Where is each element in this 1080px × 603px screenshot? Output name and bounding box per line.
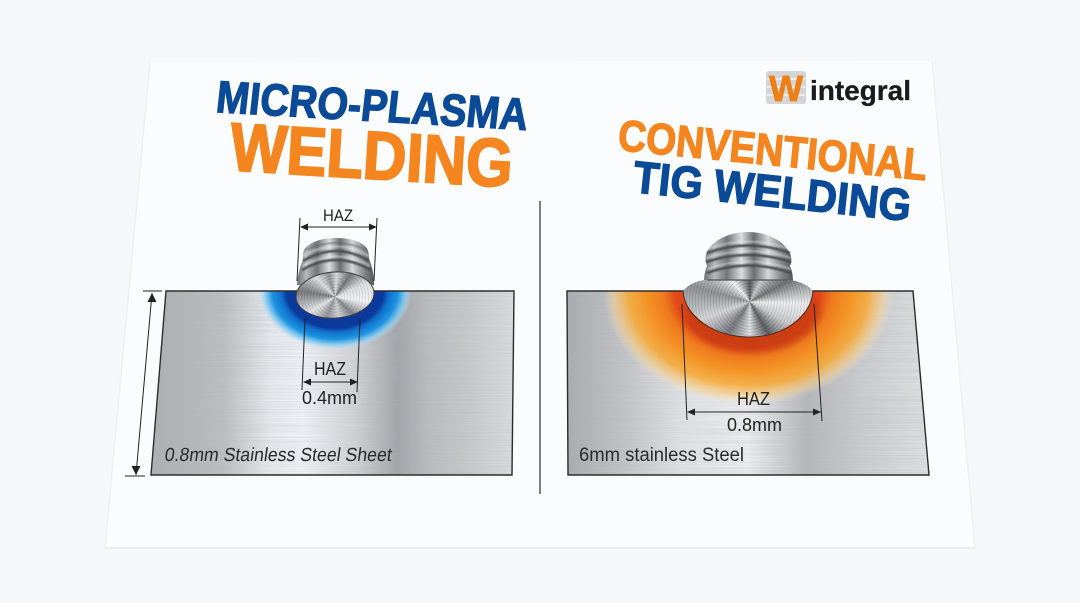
logo: Wintegral: integral: [810, 75, 911, 106]
weld bead: TIG: [683, 232, 814, 339]
poster sheet: [105, 61, 975, 548]
HAZ dimension: micro-plasma 0.4mm: 0.4mm: [302, 388, 357, 408]
label: 0.8mm sheet: 0.8mm Stainless Steel Sheet: [163, 445, 394, 466]
HAZ dimension: micro-plasma 0.4mm: HAZ: [314, 359, 346, 379]
title: conventional tig welding: CONVENTIONAL: [616, 111, 929, 190]
panel: micro-plasma steel sheet: [150, 290, 515, 476]
label: 6mm stainless: 6mm stainless Steel: [579, 445, 744, 466]
HAZ dimension: TIG 0.8mm: 0.8mm: [727, 415, 782, 435]
weld bead: micro-plasma: [294, 238, 376, 321]
heat affected zone: blue: [260, 292, 411, 348]
logo: Wintegral: [766, 68, 911, 109]
heat affected zone: orange: [606, 292, 890, 403]
title: micro-plasma welding: WELDING: [228, 109, 515, 202]
title: micro-plasma welding: [214, 71, 531, 202]
sheet thickness arrow: [125, 291, 162, 476]
title: micro-plasma welding: MICRO-PLASMA: [214, 71, 531, 140]
HAZ dimension: TIG 0.8mm: HAZ: [737, 389, 770, 409]
panel: TIG steel sheet: [566, 290, 930, 476]
logo: Wintegral: W: [769, 68, 803, 109]
title: conventional tig welding: [616, 111, 929, 231]
title: conventional tig welding: TIG WELDING: [631, 151, 914, 231]
HAZ dimension: TIG 0.8mm: [682, 304, 822, 435]
HAZ dimension: micro-plasma 0.4mm: [302, 318, 360, 408]
HAZ dimension: micro-plasma top: HAZ: [323, 206, 353, 225]
center divider: [539, 201, 541, 494]
HAZ dimension: micro-plasma top: [297, 206, 377, 281]
